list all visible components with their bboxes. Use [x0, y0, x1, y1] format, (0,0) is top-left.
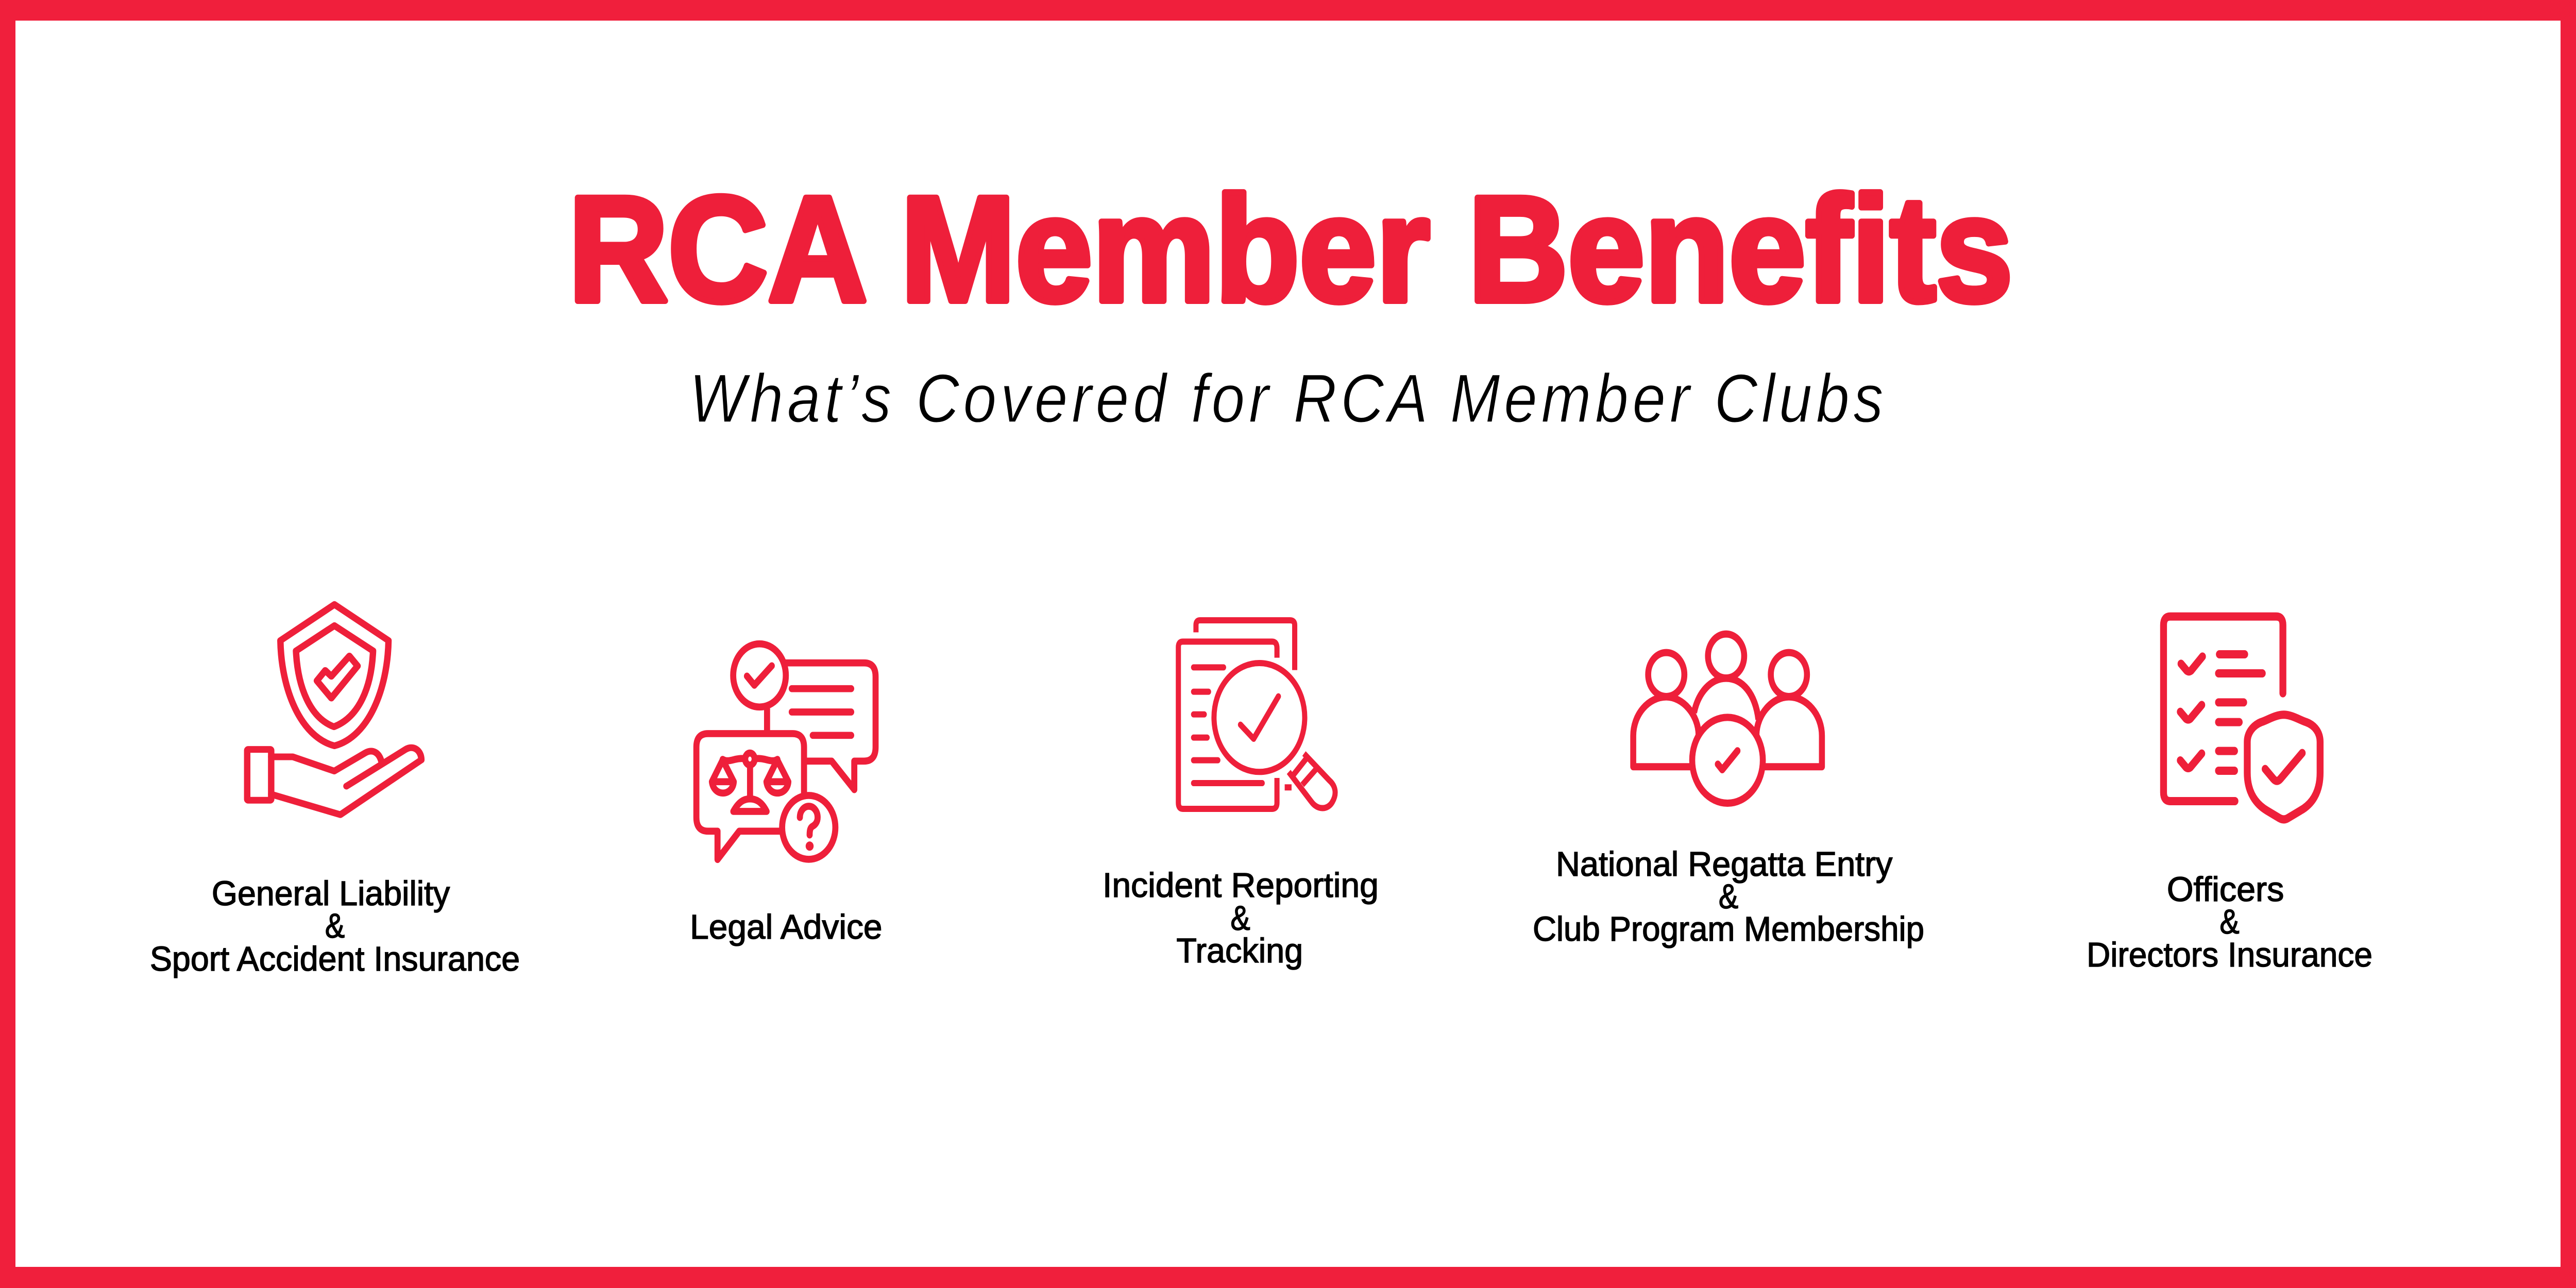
- label: national regatta entry: &: [1719, 877, 1738, 916]
- label: national regatta entry: National Regatta Entry: [1556, 845, 1893, 884]
- panel: legal advice: [690, 644, 882, 946]
- subtitle: What’s Covered for RCA Member Clubs: [689, 360, 1887, 436]
- icon: checklist with shield: [2163, 617, 2320, 819]
- panel: national regatta entry and club program membership: [1533, 634, 1924, 948]
- label: general liability: General Liability: [212, 874, 450, 913]
- label: general liability: &: [325, 907, 345, 945]
- panel: incident reporting and tracking: [1103, 620, 1379, 970]
- label: general liability: [150, 874, 520, 978]
- label: incident reporting: &: [1230, 899, 1250, 938]
- label: officers and directors insurance: Directors Insurance: [2087, 936, 2372, 974]
- label: national regatta entry: [1533, 845, 1924, 948]
- label: legal advice: Legal Advice: [690, 908, 883, 946]
- panel: officers and directors insurance: [2087, 617, 2372, 974]
- icon: documents under magnifying glass: [1178, 620, 1335, 809]
- label: officers and directors insurance: &: [2219, 903, 2240, 941]
- panel: general liability and sport accident insurance: [150, 604, 520, 978]
- label: incident reporting: Incident Reporting: [1103, 866, 1379, 905]
- icon: speech bubbles with scales: [697, 644, 876, 859]
- icon: three people with check badge: [1633, 634, 1822, 803]
- title: RCA Member Benefits: [568, 165, 2013, 333]
- label: general liability: Sport Accident Insurance: [150, 940, 520, 978]
- label: officers and directors insurance: [2087, 870, 2372, 974]
- label: national regatta entry: Club Program Membership: [1533, 910, 1924, 948]
- label: incident reporting: [1103, 866, 1379, 970]
- icon: shield above open hand: [247, 604, 421, 815]
- label: officers and directors insurance: Officers: [2167, 870, 2284, 909]
- label: incident reporting: Tracking: [1176, 931, 1303, 970]
